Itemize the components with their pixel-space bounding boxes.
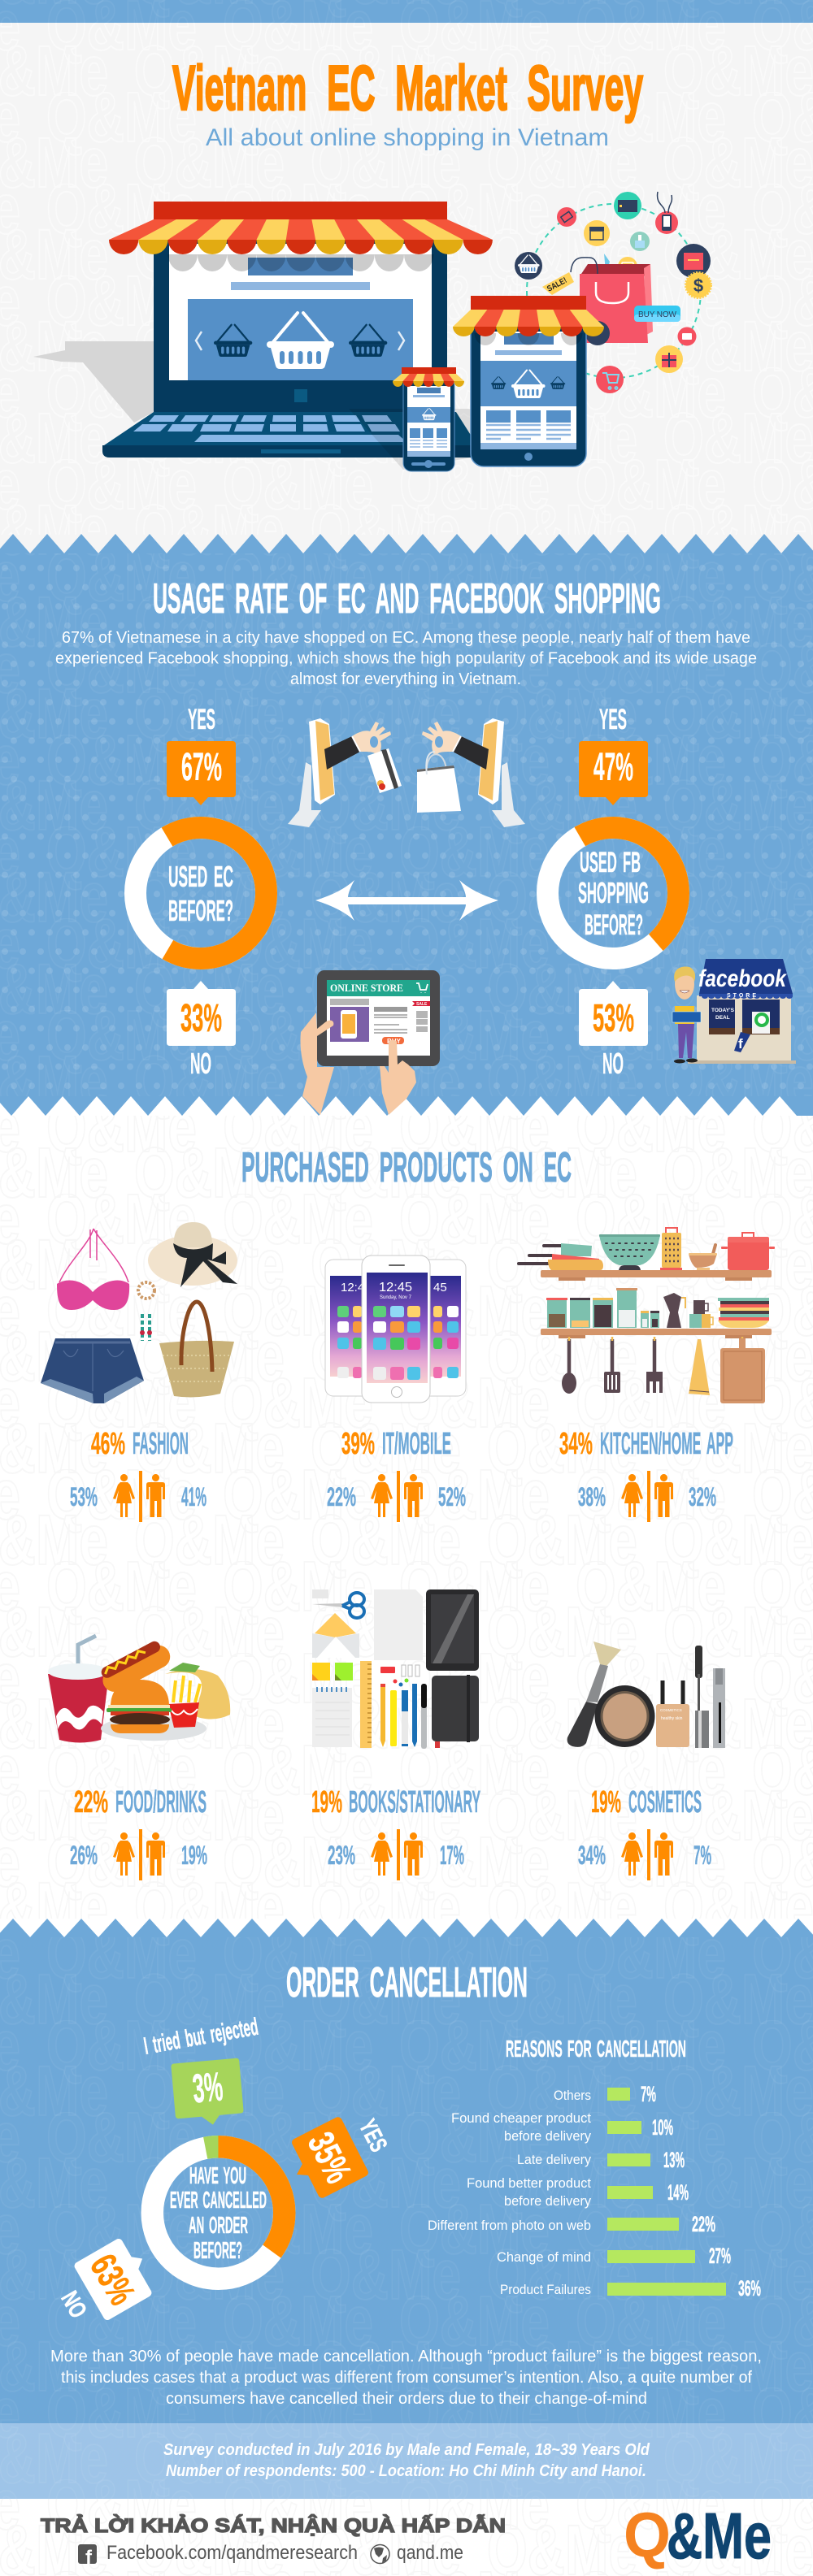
panel: usage rate of EC and Facebook shopping xyxy=(55,575,796,1115)
gender split: cosmetics: 34% xyxy=(578,1841,606,1870)
callout: tried but rejected xyxy=(141,2014,260,2127)
bar chart: reasons for cancellation: Found better product xyxy=(467,2175,591,2191)
icon: facebook store with man xyxy=(672,959,796,1064)
panel background: order cancellation xyxy=(0,1919,813,2499)
summary text: consumers have cancelled their orders due to their change-of-mind xyxy=(166,2390,647,2408)
gender split: kitchen/home app: 32% xyxy=(689,1482,716,1511)
donut: used FB shopping before: USED FB xyxy=(580,847,641,878)
image: smartphones xyxy=(325,1255,466,1403)
donut: used FB shopping before: YES xyxy=(599,704,627,735)
label: 22% food/drinks: 22% xyxy=(74,1785,108,1819)
icon: facebook store with man: facebook xyxy=(698,965,787,992)
donut: ever cancelled an order xyxy=(141,2136,296,2290)
image: fashion items xyxy=(41,1222,237,1403)
label: 34% kitchen/home app xyxy=(559,1427,733,1461)
icon: hands exchanging card and bag through monitors xyxy=(288,718,525,827)
bar chart: reasons for cancellation: Found cheaper product xyxy=(451,2110,591,2126)
callout: yes 35% xyxy=(282,2115,392,2204)
bar chart: reasons for cancellation: 14% xyxy=(667,2180,689,2205)
survey note band xyxy=(0,2423,813,2499)
bar chart: reasons for cancellation: Change of mind xyxy=(497,2249,591,2265)
survey note band: Number of respondents: 500 - Location: Ho Chi Minh City and Hanoi. xyxy=(166,2462,646,2480)
bar chart: reasons for cancellation: Different from photo on web xyxy=(428,2218,591,2233)
callout: yes 35%: 35% xyxy=(300,2126,360,2189)
item: fashion: FASHION xyxy=(133,1427,189,1461)
bar chart: reasons for cancellation: before delivery xyxy=(504,2193,591,2209)
label: 39% IT/mobile: 39% xyxy=(341,1427,375,1461)
gender split: IT/mobile: 22% xyxy=(327,1482,356,1511)
callout: no 63%: NO xyxy=(55,2287,92,2322)
gender split: fashion xyxy=(70,1471,207,1522)
callout: tried but rejected: I tried but rejected xyxy=(141,2014,260,2060)
intro text: almost for everything in Vietnam. xyxy=(290,670,521,688)
item: books/stationary: 17% xyxy=(440,1841,464,1870)
bar chart: reasons for cancellation: 13% xyxy=(663,2148,685,2172)
icon: facebook store with man: TODAY'S xyxy=(711,1008,735,1013)
gender split: kitchen/home app xyxy=(578,1471,716,1522)
donut: used FB shopping before: 53% xyxy=(593,997,634,1040)
donut: used EC before xyxy=(111,704,290,1080)
item: fashion: 41% xyxy=(181,1482,207,1511)
panel background: usage rate xyxy=(0,534,813,1116)
hero illustration: phone storefront xyxy=(393,367,464,471)
logo: &Me xyxy=(667,2500,772,2572)
image: smartphones: 45 xyxy=(433,1281,447,1295)
icon: online store tablet with hands xyxy=(300,970,440,1115)
donut: used FB shopping before: 47% xyxy=(593,746,633,789)
panel background: white products section xyxy=(0,1096,797,1950)
panel: order cancellation: ORDER CANCELLATION xyxy=(286,1959,528,2006)
item: food/drinks: FOOD/DRINKS xyxy=(115,1785,207,1819)
label: 39% IT/mobile xyxy=(341,1427,451,1461)
label: 19% cosmetics xyxy=(591,1785,702,1819)
subtitle: All about online shopping in Vietnam xyxy=(206,124,609,151)
intro text: experienced Facebook shopping, which shows the high popularity of Facebook and its wide usage xyxy=(55,648,757,668)
intro text: 67% of Vietnamese in a city have shopped on EC. Among these people, nearly half of them have xyxy=(62,628,750,647)
label: 19% books/stationary: 19% xyxy=(311,1785,342,1819)
donut: used EC before: NO xyxy=(190,1047,211,1080)
image: cosmetics xyxy=(567,1641,725,1748)
donut: ever cancelled an order: HAVE YOU xyxy=(189,2163,246,2189)
item: fashion xyxy=(41,1222,237,1522)
image: cosmetics: COSMETICS xyxy=(660,1708,682,1712)
footer xyxy=(0,2499,813,2576)
call to action: TRẢ LỜI KHẢO SÁT, NHẬN QUÀ HẤP DẪN xyxy=(41,2513,506,2537)
icon: facebook store with man: f xyxy=(738,1036,743,1052)
gender split: IT/mobile: 52% xyxy=(438,1482,466,1511)
gender split: kitchen/home app: 38% xyxy=(578,1482,606,1511)
donut: used FB shopping before: BEFORE? xyxy=(585,909,643,941)
icon: facebook xyxy=(78,2544,97,2569)
bar chart: reasons for cancellation: Others xyxy=(554,2088,591,2103)
bar chart: reasons for cancellation: 10% xyxy=(652,2115,673,2140)
facebook link: Facebook.com/qandmeresearch xyxy=(107,2542,358,2564)
icon: facebook store with man: STORE xyxy=(727,993,756,999)
bar chart: reasons for cancellation xyxy=(428,2036,761,2301)
item: cosmetics: COSMETICS xyxy=(628,1785,702,1819)
item: cosmetics: 7% xyxy=(693,1841,711,1870)
hero illustration: tablet storefront xyxy=(453,296,604,466)
donut: ever cancelled an order: BEFORE? xyxy=(193,2238,242,2264)
gender split: cosmetics xyxy=(578,1829,711,1880)
donut: used FB shopping before: SHOPPING xyxy=(578,876,649,909)
bar chart: reasons for cancellation: Product Failures xyxy=(500,2282,591,2297)
donut: used EC before: BEFORE? xyxy=(168,894,233,927)
page background: top band xyxy=(0,0,813,23)
gender split: books/stationary xyxy=(328,1829,464,1880)
logo: Q xyxy=(624,2499,671,2570)
item: IT/mobile xyxy=(325,1255,466,1522)
image: smartphones: 12:4 xyxy=(341,1281,364,1295)
icon: online store tablet with hands: ONLINE STORE xyxy=(330,982,403,994)
donut: used FB shopping before xyxy=(524,704,702,1080)
item: cosmetics xyxy=(567,1641,725,1880)
panel: purchased products xyxy=(41,1144,775,1880)
image: smartphones: Sunday, Nov 7 xyxy=(380,1295,412,1300)
summary text: this includes cases that a product was different from consumer’s intention. Also, a quite number of xyxy=(61,2369,752,2387)
bar chart: reasons for cancellation: Late delivery xyxy=(517,2152,591,2167)
callout: yes 35%: YES xyxy=(354,2115,392,2157)
hero illustration: laptop storefront xyxy=(33,202,493,470)
image: smartphones: 12:45 xyxy=(379,1281,412,1295)
icon: online store tablet with hands: BUY xyxy=(387,1038,402,1045)
panel: purchased products: BOOKS/STATIONARY xyxy=(349,1785,480,1819)
icon: globe xyxy=(371,2545,389,2563)
hero illustration: shopping icon ring: BUY NOW xyxy=(638,310,677,319)
summary text: More than 30% of people have made cancellation. Although “product failure” is the biggest reason, xyxy=(50,2348,762,2366)
label: 46% fashion xyxy=(91,1427,189,1461)
label: 19% books/stationary xyxy=(311,1785,480,1819)
item: kitchen/home app xyxy=(517,1228,775,1522)
bar chart: reasons for cancellation: 22% xyxy=(692,2212,715,2236)
gender split: food/drinks xyxy=(70,1829,207,1880)
item: IT/mobile: IT/MOBILE xyxy=(382,1427,451,1461)
icon: facebook: f xyxy=(85,2547,93,2569)
callout: no 63%: 63% xyxy=(82,2247,144,2312)
image: kitchen shelves xyxy=(517,1228,775,1403)
image: fast food xyxy=(48,1636,230,1742)
label: 46% fashion: 46% xyxy=(91,1427,125,1461)
bar chart: reasons for cancellation: 27% xyxy=(709,2244,731,2268)
bar chart: reasons for cancellation: 7% xyxy=(641,2082,656,2106)
image: cosmetics: healthy skin xyxy=(661,1716,683,1721)
icon: online store tablet with hands: SALE xyxy=(416,1002,428,1007)
item: books/stationary xyxy=(311,1589,480,1880)
icon: facebook store with man: DEAL xyxy=(715,1015,730,1021)
label: 22% food/drinks xyxy=(74,1785,207,1819)
survey note band: Survey conducted in July 2016 by Male and Female, 18~39 Years Old xyxy=(163,2441,650,2459)
callout: tried but rejected: 3% xyxy=(191,2063,224,2111)
hero illustration: shopping icon ring: SALE! xyxy=(546,276,568,294)
gender split: books/stationary: 23% xyxy=(328,1841,355,1870)
bar chart: reasons for cancellation: before delivery xyxy=(504,2128,591,2144)
image: stationery flatlay xyxy=(312,1589,479,1749)
donut: ever cancelled an order: EVER CANCELLED xyxy=(170,2188,267,2214)
panel: order cancellation xyxy=(50,1959,762,2408)
gender split: fashion: 53% xyxy=(70,1482,98,1511)
donut: used EC before: 67% xyxy=(181,746,222,789)
donut: used EC before: 33% xyxy=(180,997,222,1040)
item: food/drinks: 19% xyxy=(181,1841,207,1870)
gender split: IT/mobile xyxy=(327,1471,466,1522)
logo xyxy=(624,2499,772,2572)
summary text xyxy=(50,2348,762,2408)
callout: no 63% xyxy=(55,2233,160,2322)
gender split: food/drinks: 26% xyxy=(70,1841,98,1870)
item: food/drinks xyxy=(48,1636,230,1880)
hero illustration: shopping icon ring xyxy=(515,192,711,393)
donut: used EC before: USED EC xyxy=(168,860,233,893)
hero background xyxy=(0,23,813,553)
website link: qand.me xyxy=(397,2542,463,2564)
arrow: double headed xyxy=(315,880,498,921)
intro text xyxy=(55,628,757,688)
bar chart: reasons for cancellation: 36% xyxy=(738,2276,761,2301)
donut: ever cancelled an order: AN ORDER xyxy=(189,2213,248,2239)
hero illustration: shopping icon ring: $ xyxy=(693,275,703,296)
label: 19% cosmetics: 19% xyxy=(591,1785,621,1819)
donut: used EC before: YES xyxy=(188,704,215,735)
label: 34% kitchen/home app: 34% xyxy=(559,1427,593,1461)
donut: used FB shopping before: NO xyxy=(602,1047,624,1080)
